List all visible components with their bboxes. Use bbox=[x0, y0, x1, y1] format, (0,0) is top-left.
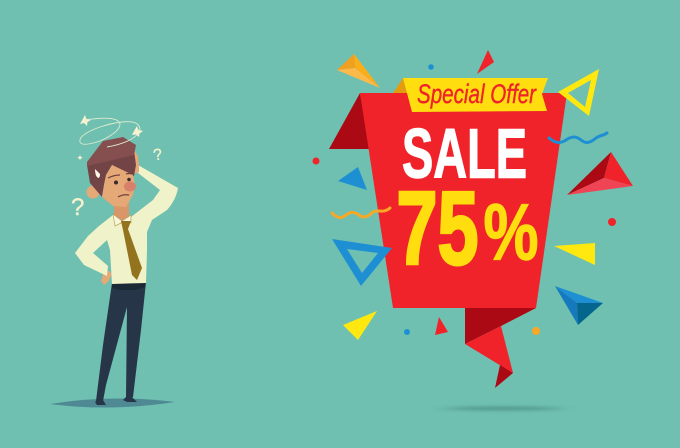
left fold bbox=[329, 93, 370, 149]
eyes bbox=[114, 178, 131, 184]
yellow outline triangle bbox=[558, 69, 599, 116]
hand on hip bbox=[101, 271, 112, 285]
ground shadow bbox=[50, 398, 175, 408]
ribbon back fold bbox=[393, 78, 408, 93]
lower red fold bbox=[465, 326, 513, 373]
collar bbox=[113, 214, 131, 226]
raised hand bbox=[133, 151, 139, 174]
blue wave bbox=[549, 133, 607, 142]
lower dark fold bbox=[465, 308, 536, 344]
trousers bbox=[95, 282, 146, 405]
lower hair bbox=[87, 150, 136, 197]
sweat drop bbox=[95, 169, 100, 178]
red pyramid bbox=[567, 152, 633, 195]
banner body bbox=[360, 93, 567, 308]
orange pyramid bbox=[337, 54, 380, 88]
blue outline triangle bbox=[332, 239, 392, 286]
orange wave bbox=[332, 208, 390, 217]
question mark right: ? bbox=[152, 146, 164, 165]
question mark left: ? bbox=[71, 194, 84, 221]
blue small triangle bbox=[338, 167, 367, 190]
dizzy stars bbox=[77, 115, 143, 160]
percent sign: % bbox=[484, 188, 538, 276]
hair top bbox=[87, 137, 136, 166]
sale banner bbox=[329, 78, 567, 388]
ear bbox=[86, 186, 100, 198]
belt bbox=[112, 282, 146, 290]
shirt torso and arms bbox=[75, 165, 178, 284]
red small lower triangle bbox=[435, 317, 448, 335]
red dot right bbox=[608, 218, 616, 226]
banner floor shadow bbox=[445, 406, 561, 410]
lower tip bbox=[495, 365, 513, 388]
yellow ribbon bbox=[403, 78, 548, 112]
blue dot top bbox=[428, 64, 434, 70]
blue dot lower bbox=[404, 329, 410, 335]
sale text: SALE bbox=[402, 114, 527, 192]
tie bbox=[121, 221, 142, 280]
yellow lower triangle bbox=[343, 311, 377, 340]
nose bbox=[124, 182, 136, 192]
75 text: 75 bbox=[396, 171, 478, 287]
eyebrows and mouth bbox=[108, 174, 133, 197]
confetti decorations bbox=[312, 50, 633, 340]
orange dot lower bbox=[532, 327, 540, 335]
yellow right triangle bbox=[554, 243, 595, 265]
face bbox=[102, 165, 135, 207]
man: confused character bbox=[50, 115, 178, 408]
neck bbox=[114, 200, 129, 222]
dizzy halo spiral bbox=[80, 118, 140, 147]
special offer text: Special Offer bbox=[417, 79, 537, 109]
red dot left bbox=[312, 158, 320, 164]
red top triangle bbox=[477, 50, 494, 74]
blue pyramid bbox=[555, 286, 603, 325]
